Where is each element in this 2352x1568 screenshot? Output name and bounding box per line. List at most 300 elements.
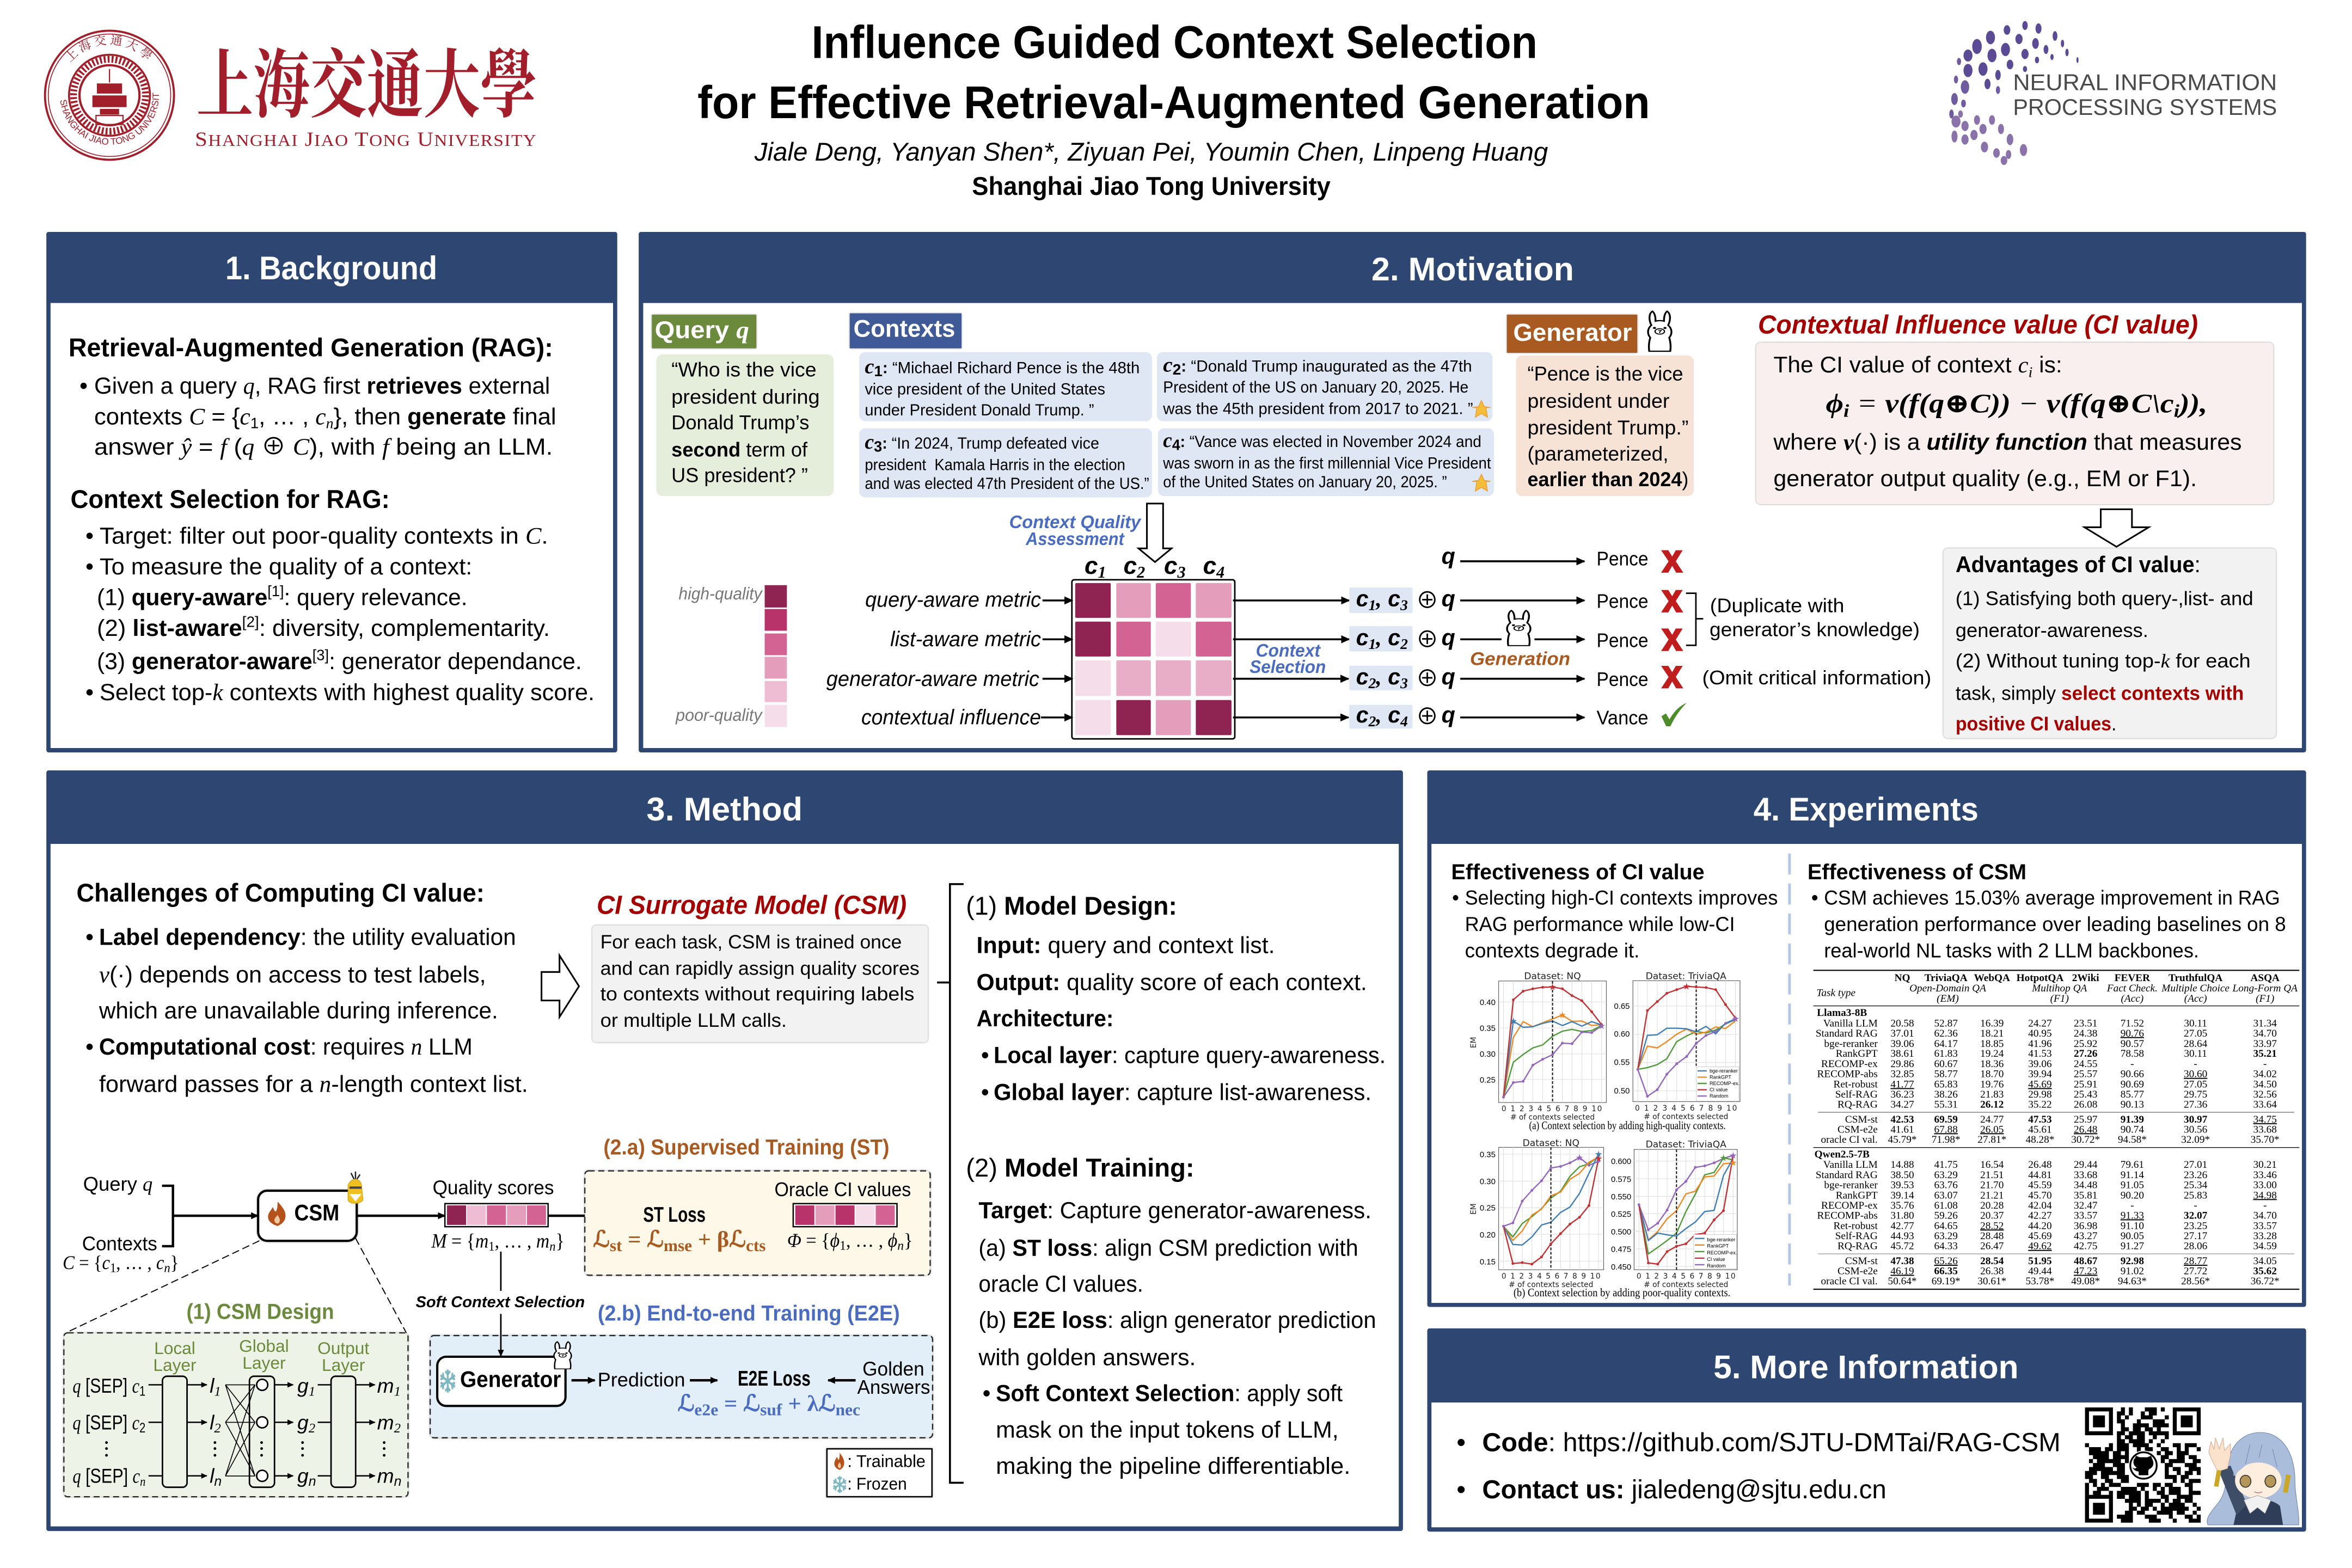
- callout: CI value definition: )),: [2177, 388, 2207, 418]
- table: results by model and dataset: FEVER: [2115, 972, 2151, 984]
- callout: context c1: vice president of the United States: [865, 381, 1105, 398]
- note: duplicate with generator's knowledge: generator’s knowledge): [1710, 618, 1920, 640]
- table: results by model and dataset: 39.94: [2028, 1069, 2052, 1080]
- table: results by model and dataset: Task type: [1816, 987, 1855, 999]
- bar: quality scores: n: [549, 1239, 555, 1254]
- table: results by model and dataset: 26.48: [2028, 1159, 2052, 1171]
- table: results by model and dataset: 28.54: [1980, 1255, 2004, 1267]
- table: results by model and dataset: 36.98: [2074, 1220, 2097, 1232]
- callout: CI value definition: is:: [2032, 352, 2062, 377]
- table: results by model and dataset: 33.64: [2253, 1099, 2277, 1111]
- table: results by model and dataset: Self-RAG: [1835, 1089, 1878, 1100]
- callout: context c4: :: [1180, 433, 1185, 451]
- chart: dataset TriviaQA, adding high-quality contexts: CI value: [1710, 1087, 1728, 1093]
- text block: model design: •: [981, 1079, 989, 1105]
- callout: query text: president during: [671, 386, 820, 408]
- table: results by model and dataset: Open-Domain QA: [1909, 983, 1986, 994]
- heading: RAG: Retrieval-Augmented Generation (RAG):: [69, 333, 553, 362]
- divider: [1789, 854, 1790, 1285]
- chart: dataset TriviaQA, adding poor-quality contexts: ★: [1729, 1158, 1737, 1168]
- selected context sets: 4: [1400, 713, 1408, 730]
- table: results by model and dataset: 58.77: [1934, 1069, 1958, 1080]
- table: results by model and dataset: 39.53: [1890, 1180, 1914, 1191]
- chart: dataset TriviaQA, adding poor-quality contexts: 0.600: [1611, 1157, 1631, 1166]
- panel: 3. Method: [46, 770, 1403, 1531]
- text block: challenges: which are unavailable during inference.: [99, 998, 498, 1024]
- table: results by model and dataset: 66.35: [1934, 1265, 1958, 1277]
- table: results by model and dataset: 62.36: [1934, 1028, 1958, 1039]
- text block: model training: (a) ST loss: align CSM prediction with: [978, 1235, 1358, 1260]
- table: results by model and dataset: 26.08: [2074, 1099, 2097, 1111]
- text block: CSM result: CSM achieves 15.03% average improvement in RAG: [1824, 886, 2280, 909]
- heading: 5. More Information: 5. More Information: [1713, 1349, 2019, 1386]
- table: results by model and dataset: 41.96: [2028, 1038, 2052, 1050]
- table: results by model and dataset: Qwen2.5-7B: [1815, 1149, 1870, 1160]
- box: E2E training: + λℒ: [782, 1391, 836, 1416]
- table: results by model and dataset: Self-RAG: [1835, 1230, 1878, 1242]
- chart: dataset NQ, adding high-quality contexts: EM: [1469, 1037, 1478, 1048]
- outputs: generator answers: Pence: [1597, 669, 1649, 690]
- chart: dataset NQ, adding poor-quality contexts: 0.25: [1480, 1204, 1496, 1212]
- text block: context selection bullets: [1]: [267, 583, 284, 599]
- text block: context selection bullets: •: [85, 679, 94, 706]
- table: results by model and dataset: 34.59: [2253, 1241, 2277, 1252]
- table: results by model and dataset: Ret-robust: [1833, 1079, 1878, 1090]
- diagram: CSM design layers: n: [394, 1474, 401, 1489]
- table: results by model and dataset: 91.02: [2121, 1265, 2144, 1277]
- table: results by model and dataset: 39.06: [2028, 1058, 2052, 1070]
- title: for Effective Retrieval-Augmented Generation: [697, 77, 1650, 128]
- text block: context selection bullets: : diversity, complementarity.: [259, 615, 550, 641]
- heading: challenges: Challenges of Computing CI value:: [77, 879, 485, 907]
- table: results by model and dataset: 20.37: [1980, 1210, 2004, 1222]
- table: results by model and dataset: RQ-RAG: [1837, 1099, 1878, 1111]
- label: Context Selection: Context: [1256, 641, 1321, 661]
- text block: model design: [966, 892, 1386, 1105]
- table: results by model and dataset: 21.21: [1980, 1190, 2004, 1201]
- table: results by model and dataset: 78.58: [2121, 1048, 2144, 1059]
- text block: challenges: •: [85, 924, 94, 951]
- labels: metric names: generator-aware metric: [826, 667, 1039, 691]
- chart: dataset TriviaQA, adding high-quality contexts: RankGPT: [1710, 1074, 1731, 1080]
- text block: code link: Code: https://github.com/SJTU-DMTai/RAG-CSM: [1482, 1428, 2061, 1457]
- table: results by model and dataset: 16.54: [1980, 1159, 2004, 1171]
- callout: context c3: c: [865, 431, 874, 454]
- chart: dataset NQ, adding poor-quality contexts: ★: [1595, 1154, 1603, 1164]
- legend: quality colour scale: [675, 584, 787, 727]
- table: results by model and dataset: WebQA: [1974, 972, 2010, 984]
- table: results by model and dataset: 26.47: [1980, 1241, 2004, 1252]
- chart: dataset NQ, adding high-quality contexts: 0.35: [1480, 1025, 1496, 1033]
- heading: 4. Experiments: 4. Experiments: [1754, 791, 1979, 828]
- arrow: challenges to CSM: [542, 955, 579, 1017]
- table: results by model and dataset: 91.14: [2121, 1169, 2144, 1181]
- table: results by model and dataset: 40.95: [2028, 1028, 2052, 1039]
- text block: challenges: v(·) depends on access to test labels,: [99, 962, 486, 988]
- chart: dataset TriviaQA, adding high-quality contexts: 0.50: [1614, 1087, 1630, 1095]
- bar: quality scores: 1: [488, 1239, 495, 1254]
- table: results by model and dataset: [1814, 970, 2299, 1289]
- bar: quality scores: Quality scores: [433, 1177, 554, 1198]
- table: results by model and dataset: 34.48: [2074, 1180, 2097, 1191]
- table: results by model and dataset: 47.53: [2028, 1114, 2052, 1125]
- diagram: CSM design layers: Layer: [242, 1353, 286, 1373]
- chart: dataset TriviaQA, adding poor-quality contexts: 0.450: [1611, 1263, 1631, 1272]
- diagram: CSM design layers: l: [210, 1374, 214, 1397]
- chart: dataset NQ, adding poor-quality contexts: ★: [1576, 1153, 1584, 1163]
- diagram: CSM design layers: m: [377, 1411, 394, 1434]
- outputs: generator answers: Pence: [1597, 548, 1649, 569]
- table: results by model and dataset: 30.61*: [1977, 1276, 2006, 1287]
- table: results by model and dataset: 25.97: [2074, 1114, 2098, 1125]
- box: ST supervised training: cts: [746, 1236, 766, 1255]
- box: CSM: CSM: [295, 1200, 339, 1226]
- diagram: CSM inputs: [63, 1173, 179, 1276]
- table: results by model and dataset: 25.34: [2184, 1180, 2208, 1191]
- chart: dataset NQ, adding poor-quality contexts: 0.20: [1480, 1231, 1496, 1240]
- selected context sets: [1349, 543, 1455, 730]
- table: results by model and dataset: 90.74: [2121, 1124, 2144, 1135]
- chart: dataset TriviaQA, adding poor-quality contexts: 0.500: [1611, 1228, 1631, 1236]
- chart: dataset TriviaQA, adding high-quality contexts: Random: [1710, 1093, 1728, 1099]
- label: context quality assessment: Context Quality: [1009, 512, 1142, 532]
- label: Context Selection: [1250, 641, 1326, 677]
- table: results by model and dataset: 18.85: [1980, 1038, 2004, 1050]
- chart: dataset TriviaQA, adding poor-quality contexts: 0.475: [1611, 1246, 1631, 1254]
- table: results by model and dataset: 39.06: [1890, 1038, 1914, 1050]
- table: results by model and dataset: 79.61: [2121, 1159, 2144, 1171]
- chart: dataset NQ, adding high-quality contexts: ★: [1509, 1016, 1517, 1026]
- table: results by model and dataset: TriviaQA: [1925, 972, 1968, 984]
- diagram: CSM inputs: }: [170, 1252, 179, 1273]
- chart: dataset TriviaQA, adding high-quality contexts: bge-reranker: [1710, 1068, 1738, 1074]
- outputs: generator answers: Pence: [1597, 591, 1649, 612]
- table: results by model and dataset: 92.98: [2121, 1255, 2144, 1267]
- box: ST supervised training: = ℒ: [622, 1227, 664, 1252]
- outputs: generator answers: Pence: [1597, 630, 1649, 652]
- title: [697, 17, 1650, 128]
- table: results by model and dataset: 61.08: [1934, 1200, 1958, 1211]
- text block: model training: Target: Capture generator-awareness.: [978, 1197, 1371, 1223]
- table: results by model and dataset: 30.11: [2184, 1018, 2207, 1029]
- text block: context selection bullets: : generator dependance.: [329, 648, 582, 675]
- diagram: CSM design layers: l: [210, 1464, 214, 1487]
- chart: dataset TriviaQA, adding poor-quality contexts: Random: [1707, 1263, 1726, 1269]
- table: results by model and dataset: 27.05: [2184, 1028, 2207, 1039]
- callout: generator output: (parameterized,: [1528, 443, 1669, 465]
- table: results by model and dataset: 31.34: [2253, 1018, 2277, 1029]
- box: ST supervised training: mse: [664, 1236, 692, 1255]
- table: results by model and dataset: 45.69: [2028, 1230, 2052, 1242]
- table: results by model and dataset: 94.58*: [2118, 1134, 2147, 1146]
- heading: 1. Background: 1. Background: [225, 249, 437, 286]
- labels: matrix columns: 2: [1136, 563, 1145, 581]
- table: results by model and dataset: 21.51: [1980, 1169, 2004, 1181]
- panel: 4. Experiments: [1427, 770, 2306, 1307]
- table: results by model and dataset: 42.53: [1890, 1114, 1914, 1125]
- text block: RAG description: [79, 373, 556, 460]
- table: results by model and dataset: 2Wiki: [2072, 972, 2099, 984]
- callout: CI value definition: where v(·) is a utility function that measures: [1773, 430, 2242, 455]
- table: results by model and dataset: 45.69: [2028, 1079, 2052, 1090]
- chart: dataset TriviaQA, adding poor-quality contexts: 0.550: [1611, 1193, 1631, 1202]
- table: results by model and dataset: 25.43: [2074, 1089, 2097, 1100]
- labels: matrix columns: [1085, 553, 1224, 581]
- table: results by model and dataset: 27.01: [2184, 1159, 2207, 1171]
- table: results by model and dataset: 28.56*: [2181, 1276, 2210, 1287]
- heading: 3. Method: 3. Method: [646, 791, 803, 828]
- text block: context selection bullets: (3) generator-aware: [97, 648, 314, 675]
- illustration: waving anime character: [2207, 1432, 2299, 1525]
- bar: quality scores: m: [536, 1230, 549, 1252]
- text block: challenges: Label dependency: the utility evaluation: [99, 924, 516, 951]
- text block: model design: Local layer: capture query-awareness.: [994, 1042, 1386, 1068]
- table: results by model and dataset: RankGPT: [1836, 1048, 1878, 1059]
- table: results by model and dataset: oracle CI val.: [1821, 1276, 1878, 1287]
- chart: dataset TriviaQA, adding high-quality contexts: Dataset: TriviaQA: [1646, 971, 1726, 982]
- diagram: CSM design layers: m: [377, 1374, 394, 1397]
- table: results by model and dataset: 32.85: [1890, 1069, 1914, 1080]
- table: results by model and dataset: 29.44: [2074, 1159, 2098, 1171]
- selected context sets: ,: [1375, 625, 1382, 650]
- chart: dataset TriviaQA, adding poor-quality contexts: # of contexts selected: [1644, 1281, 1728, 1289]
- text block: model design: •: [981, 1042, 989, 1068]
- table: results by model and dataset: 50.64*: [1888, 1276, 1917, 1287]
- box: E2E training: = ℒ: [718, 1391, 760, 1416]
- text block: model design: Output: quality score of each context.: [977, 970, 1367, 995]
- chart: dataset NQ, adding poor-quality contexts: 0.30: [1480, 1178, 1496, 1186]
- text block: context selection bullets: : query relevance.: [284, 585, 467, 611]
- text block: model training: oracle CI values.: [978, 1271, 1143, 1297]
- chart: dataset NQ, adding high-quality contexts: ★: [1597, 1021, 1606, 1031]
- box: ST supervised training: }: [904, 1229, 912, 1251]
- icon: GitHub logo in QR code: [2128, 1450, 2159, 1480]
- text block: context selection bullets: Target: filter out poor-quality contexts in C.: [100, 523, 548, 549]
- table: results by model and dataset: 23.25: [2184, 1220, 2207, 1232]
- diagram: CSM design layers: q [SEP] c: [72, 1464, 142, 1487]
- callout: query text: [657, 354, 834, 496]
- table: results by model and dataset: 31.80: [1890, 1210, 1914, 1222]
- callout: context c2: “Donald Trump inaugurated as the 47th: [1191, 358, 1467, 375]
- table: results by model and dataset: 27.36: [2184, 1099, 2208, 1111]
- selected context sets: ,: [1375, 702, 1382, 727]
- table: results by model and dataset: Multiple Choice: [2161, 983, 2230, 994]
- chart: dataset TriviaQA, adding high-quality contexts: 0 1 2 3 4 5 6 7 8 9 10: [1635, 1104, 1737, 1113]
- table: results by model and dataset: -: [2263, 1200, 2267, 1211]
- table: results by model and dataset: Multihop QA: [2031, 983, 2087, 994]
- table: results by model and dataset: 33.28: [2253, 1230, 2277, 1242]
- selected context sets: 2: [1368, 675, 1376, 691]
- table: results by model and dataset: 33.68: [2253, 1124, 2277, 1135]
- table: results by model and dataset: -: [2194, 1200, 2197, 1211]
- text block: model training: •: [983, 1380, 990, 1406]
- chart: dataset NQ, adding poor-quality contexts: Dataset: NQ: [1523, 1138, 1579, 1149]
- diagram: CSM design layers: 2: [394, 1421, 401, 1436]
- legend: quality colour scale: high-quality: [678, 584, 763, 603]
- callout: context c2: was the 45th president from 2017 to 2021. ”: [1162, 400, 1473, 418]
- box: E2E training: Prediction: [598, 1369, 685, 1391]
- callout: query text: “Who is the vice: [671, 359, 817, 381]
- table: results by model and dataset: 47.38: [1890, 1255, 1914, 1267]
- table: results by model and dataset: 34.70: [2253, 1210, 2277, 1222]
- heading: effectiveness of CI value: Effectiveness of CI value: [1451, 860, 1705, 884]
- table: results by model and dataset: CSM-st: [1845, 1255, 1878, 1267]
- heading: Context Selection for RAG: Context Selection for RAG:: [70, 485, 390, 513]
- diagram: CSM design layers: 2: [139, 1421, 145, 1436]
- table: results by model and dataset: -: [2130, 1200, 2134, 1211]
- table: results by model and dataset: 25.57: [2074, 1069, 2098, 1080]
- box: ST supervised training: Oracle CI values: [774, 1179, 911, 1200]
- labels: matrix columns: c: [1085, 553, 1098, 579]
- legend: trainable and frozen: : Frozen: [847, 1474, 907, 1493]
- table: results by model and dataset: RQ-RAG: [1837, 1241, 1878, 1252]
- table: results by model and dataset: 49.62: [2028, 1241, 2052, 1252]
- callout: CI value definition: ϕ: [1826, 388, 1841, 418]
- authors: Jiale Deng, Yanyan Shen*, Ziyuan Pei, Youmin Chen, Linpeng Huang: [754, 138, 1548, 166]
- text block: context selection bullets: Select top-k contexts with highest quality score.: [100, 679, 595, 706]
- table: results by model and dataset: 63.07: [1934, 1190, 1958, 1201]
- tag: Generator: Generator: [1513, 318, 1632, 346]
- box: E2E training: [430, 1336, 933, 1438]
- selected context sets: 2: [1368, 713, 1376, 730]
- table: results by model and dataset: 35.62: [2253, 1265, 2277, 1277]
- table: results by model and dataset: 33.46: [2253, 1169, 2277, 1181]
- chart: dataset TriviaQA, adding poor-quality contexts: Dataset: TriviaQA: [1646, 1140, 1726, 1150]
- table: results by model and dataset: 30.11: [2184, 1048, 2207, 1059]
- text block: context selection bullets: [3]: [313, 647, 329, 664]
- callout: context c2: President of the US on January 20, 2025. He: [1163, 379, 1468, 396]
- labels: matrix columns: c: [1164, 553, 1177, 579]
- text block: RAG description: Given a query q, RAG first retrieves external: [94, 373, 550, 399]
- callout: context c1: “Michael Richard Pence is the 48th: [892, 359, 1138, 377]
- labels: matrix columns: 1: [1098, 563, 1106, 581]
- table: results by model and dataset: 38.61: [1890, 1048, 1914, 1059]
- label: Generation: Generation: [1470, 649, 1570, 670]
- table: results by model and dataset: (Acc): [2184, 993, 2207, 1004]
- table: results by model and dataset: 23.26: [2184, 1169, 2208, 1181]
- callout: advantages of CI value: (1) Satisfying both query-,list- and: [1956, 588, 2253, 610]
- labels: metric names: query-aware metric: [865, 589, 1041, 612]
- text block: model design: Global layer: capture list-awareness.: [994, 1079, 1371, 1105]
- heading: end-to-end training: (2.b) End-to-end Training (E2E): [598, 1302, 900, 1326]
- table: results by model and dataset: 26.05: [1980, 1124, 2004, 1135]
- box: ST supervised training: , … ,: [846, 1229, 888, 1251]
- table: results by model and dataset: 29.86: [1890, 1058, 1914, 1070]
- text block: challenges: •: [85, 1034, 94, 1060]
- line: selection to llama: [1460, 639, 1502, 640]
- selected context sets: ⊕: [1416, 588, 1438, 613]
- box: ST supervised training: + βℒ: [692, 1227, 746, 1252]
- chart: dataset NQ, adding high-quality contexts: 0.30: [1480, 1050, 1496, 1059]
- diagram: CSM design layers: q [SEP] c: [72, 1374, 141, 1398]
- box: ST supervised training: ST Loss: [643, 1203, 706, 1227]
- table: results by model and dataset: 28.48: [1980, 1230, 2004, 1242]
- text block: RAG description: n: [326, 415, 334, 432]
- chart: dataset TriviaQA, adding poor-quality contexts: ★: [1729, 1150, 1737, 1161]
- heading: effectiveness of CSM: Effectiveness of CSM: [1808, 860, 2026, 884]
- text block: RAG description: contexts C = {c: [94, 404, 250, 430]
- chart: dataset NQ, adding high-quality contexts: [1469, 971, 1606, 1122]
- box: ST supervised training: ℒ: [593, 1227, 610, 1252]
- table: results by model and dataset: 55.31: [1934, 1099, 1958, 1111]
- bar: quality scores: [431, 1177, 565, 1254]
- diagram: CSM design layers: Local: [154, 1338, 195, 1358]
- table: results by model and dataset: 69.19*: [1932, 1276, 1961, 1287]
- table: results by model and dataset: 30.72*: [2071, 1134, 2100, 1146]
- callout: advantages of CI value: (2) Without tuning top- k for each: [1956, 650, 2251, 672]
- diagram: CSM design layers: n: [214, 1474, 222, 1489]
- chart: quality matrix heatmap: [1072, 580, 1235, 739]
- callout: advantages of CI value: positive CI values.: [1956, 713, 2116, 734]
- table: results by model and dataset: 64.65: [1934, 1220, 1958, 1232]
- text block: model training: Soft Context Selection: apply soft: [996, 1380, 1343, 1406]
- box: E2E training: Golden: [862, 1358, 924, 1380]
- affiliation: Shanghai Jiao Tong University: [972, 172, 1331, 200]
- chart: dataset TriviaQA, adding poor-quality contexts: ★: [1719, 1153, 1728, 1163]
- table: results by model and dataset: 90.57: [2121, 1038, 2144, 1050]
- box: E2E training: ℒ: [677, 1391, 694, 1416]
- text block: CSM result: [1811, 886, 2286, 962]
- table: results by model and dataset: 18.36: [1980, 1058, 2004, 1070]
- table: results by model and dataset: 34.50: [2253, 1079, 2277, 1090]
- chart: dataset TriviaQA, adding high-quality contexts: ★: [1731, 1014, 1739, 1024]
- text block: RAG description: c: [315, 405, 326, 430]
- diagram: CSM inputs: , … ,: [116, 1252, 156, 1273]
- table: results by model and dataset: 90.20: [2121, 1190, 2144, 1201]
- table: results by model and dataset: 19.76: [1980, 1079, 2004, 1090]
- logo: NeurIPS: NEURAL INFORMATION: [2013, 70, 2277, 95]
- table: results by model and dataset: 48.67: [2074, 1255, 2098, 1267]
- table: results by model and dataset: 63.29: [1934, 1230, 1958, 1242]
- diagram: CSM design layers: l: [210, 1411, 214, 1434]
- bar: quality scores: }: [555, 1230, 565, 1252]
- table: results by model and dataset: CSM-e2e: [1837, 1124, 1878, 1135]
- table: results by model and dataset: 25.92: [2074, 1038, 2097, 1050]
- table: results by model and dataset: 27.81*: [1977, 1134, 2006, 1146]
- callout: CSM description: to contexts without requiring labels: [601, 984, 915, 1005]
- text block: CI value result: Selecting high-CI contexts improves: [1465, 886, 1778, 909]
- callout: generator output: “Pence is the vice: [1528, 363, 1683, 385]
- table: results by model and dataset: CSM-e2e: [1837, 1265, 1878, 1277]
- table: results by model and dataset: RECOMP-ex: [1821, 1200, 1878, 1211]
- labels: matrix columns: c: [1124, 553, 1137, 579]
- text block: RAG description: , … ,: [259, 404, 315, 430]
- table: results by model and dataset: Vanilla LLM: [1823, 1159, 1878, 1171]
- table: results by model and dataset: 41.61: [1890, 1124, 1914, 1135]
- table: results by model and dataset: 37.01: [1890, 1028, 1914, 1039]
- panel: 1. Background: [46, 232, 617, 752]
- callout: context c3: 3: [874, 438, 882, 455]
- callout: context c3: president Kamala Harris in the election: [865, 456, 1125, 474]
- callout: context c1: [859, 352, 1152, 421]
- logo: university name in English: SHANGHAI JIAO T ONG U NIVERSITY: [195, 128, 537, 151]
- label: context quality assessment: [1009, 512, 1142, 549]
- text block: contact: •: [1456, 1475, 1466, 1504]
- table: results by model and dataset: (Acc): [2121, 993, 2143, 1004]
- callout: context c3: and was elected 47th President of the US.”: [865, 475, 1149, 493]
- table: results by model and dataset: 35.76: [1890, 1200, 1914, 1211]
- selected context sets: c: [1356, 664, 1369, 689]
- arrows: E2E flow: [572, 1380, 856, 1381]
- icons: wrong answer marks: [1661, 550, 1683, 688]
- table: results by model and dataset: 24.38: [2074, 1028, 2097, 1039]
- table: results by model and dataset: 26.38: [1980, 1265, 2004, 1277]
- callout: CI value definition: v(f(q⊕C)) − v(f(q⊕C\c: [1885, 388, 2159, 418]
- legend: trainable and frozen: [827, 1449, 932, 1497]
- callout: generator output: president Trump.”: [1528, 416, 1688, 439]
- chart: dataset TriviaQA, adding high-quality contexts: [1614, 971, 1740, 1121]
- callout: CI value definition: =: [1849, 388, 1885, 418]
